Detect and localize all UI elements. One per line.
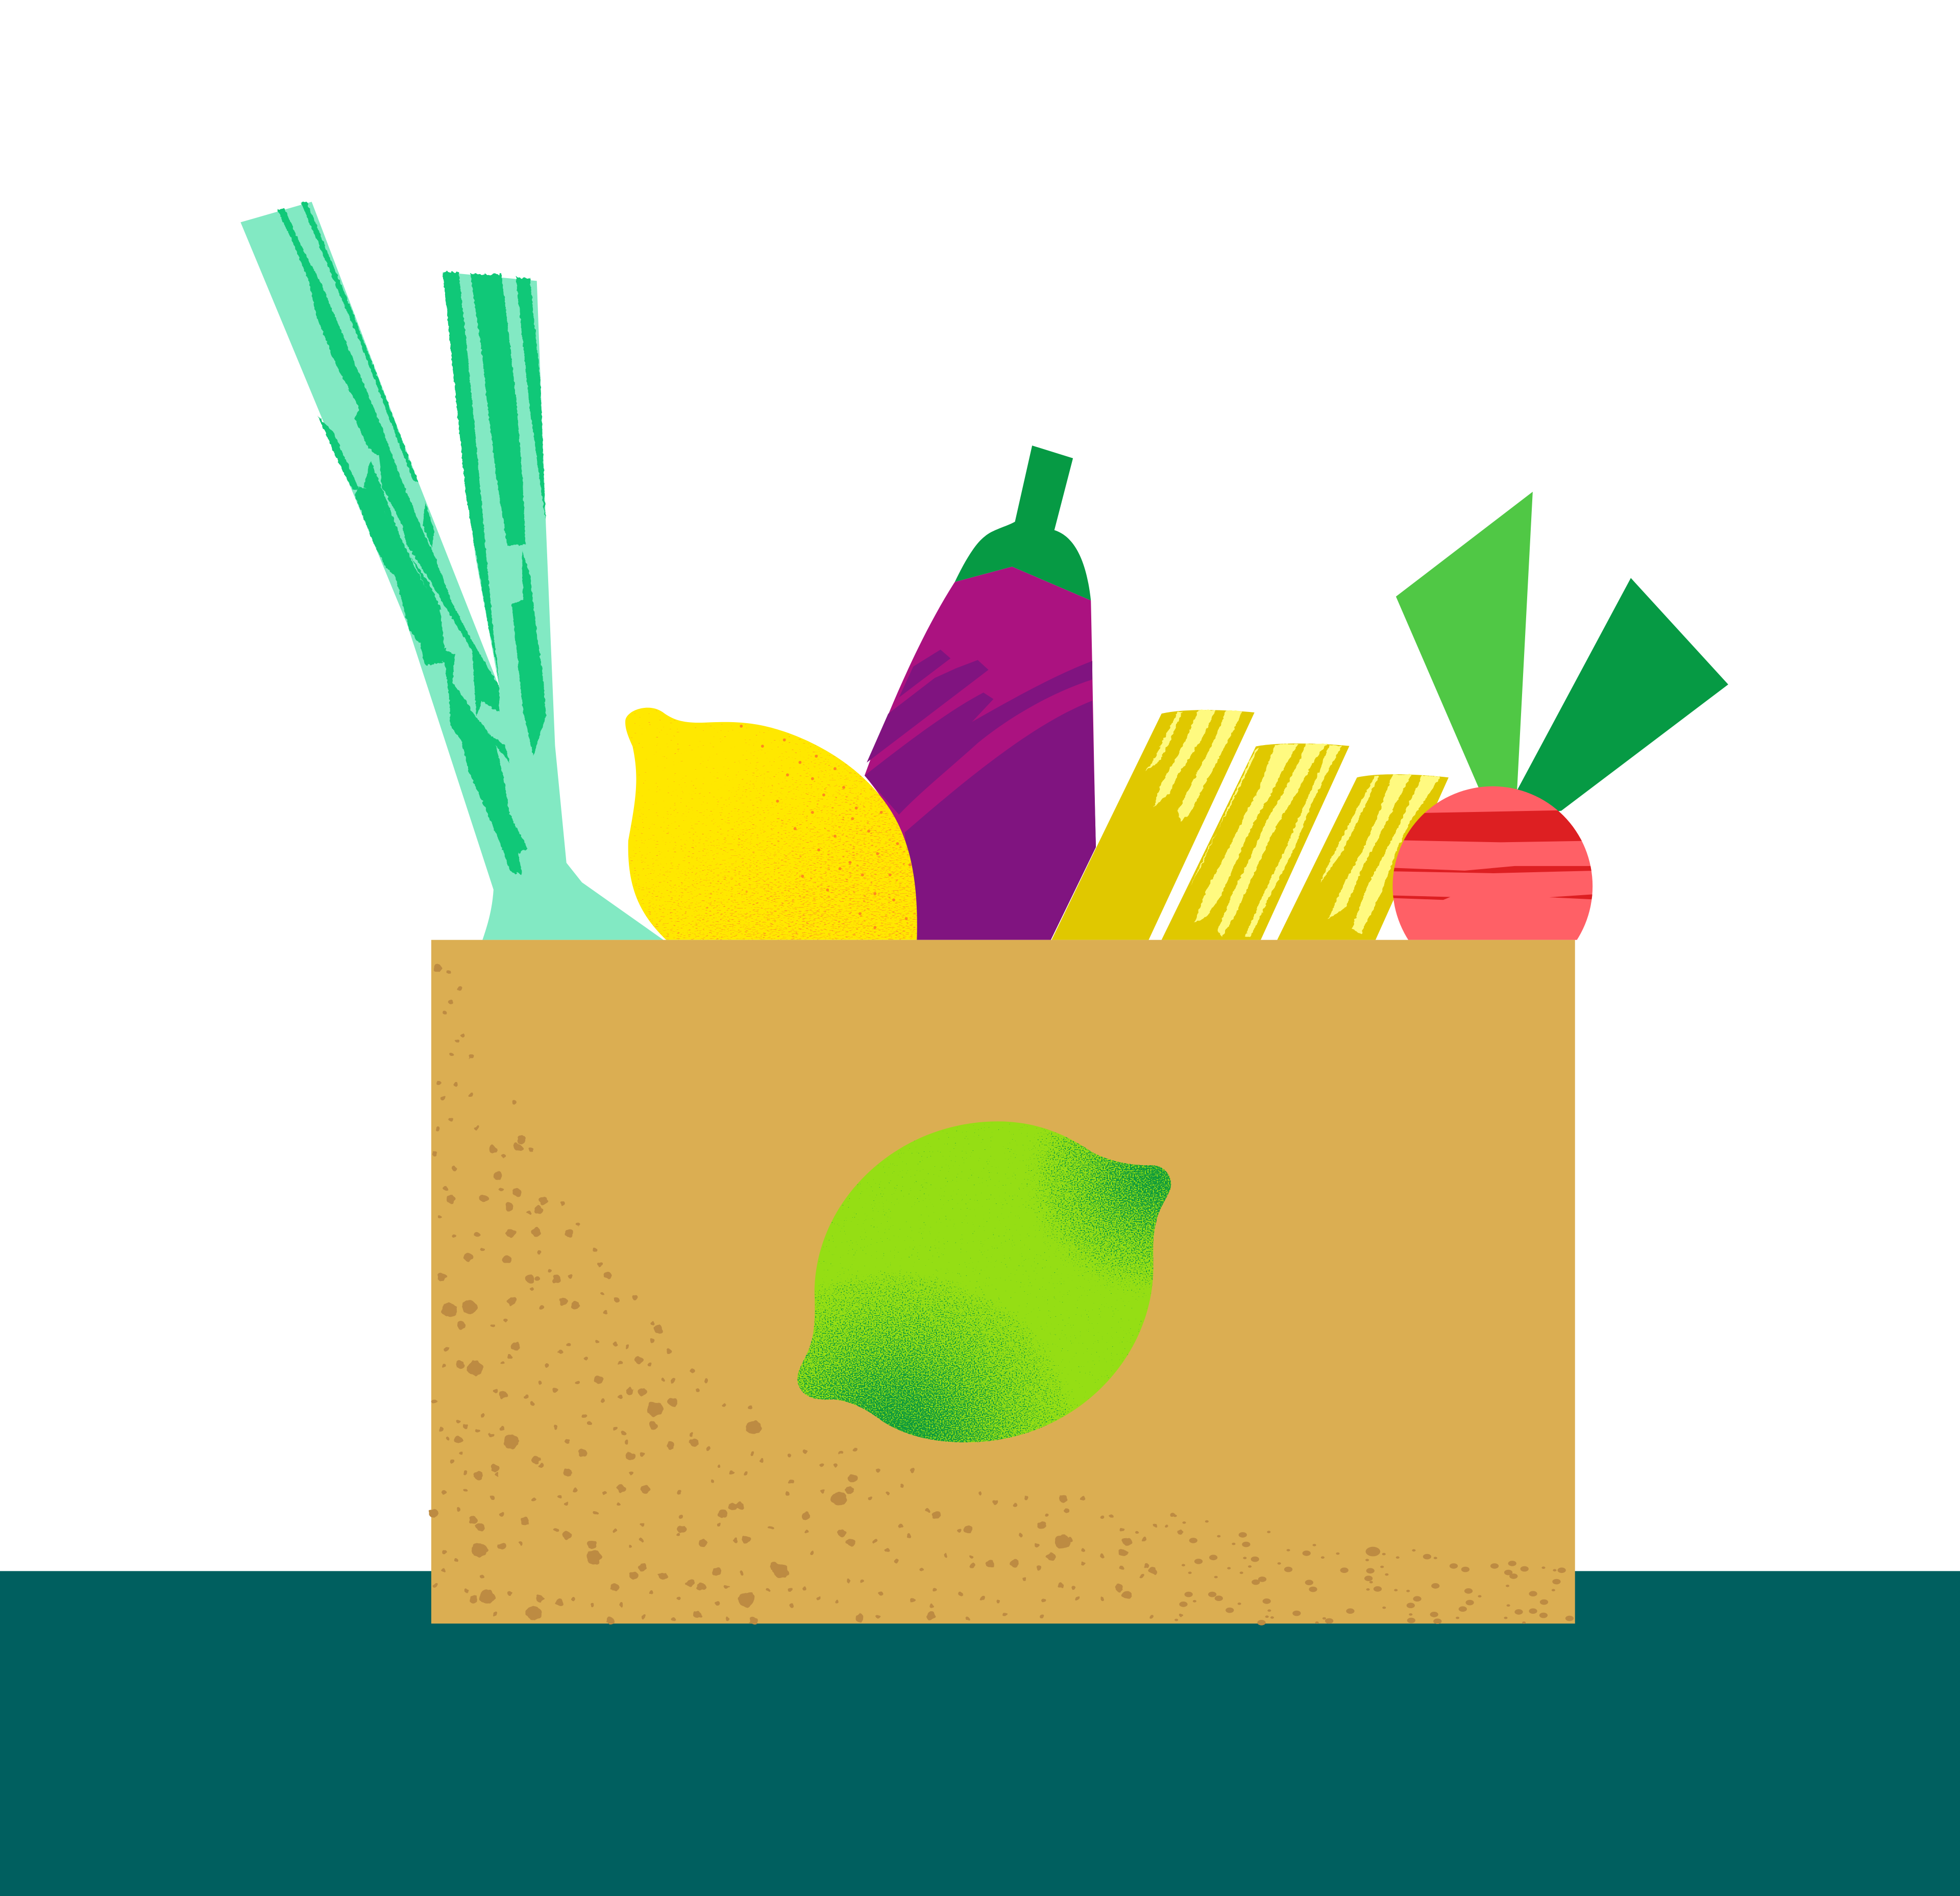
lime: upper grain shading xyxy=(797,1121,1171,1442)
box: brown speckle texture, bottom right xyxy=(1175,1516,1570,1622)
lemon: orange grain xyxy=(625,708,917,940)
eggplant: magenta body xyxy=(865,567,1096,940)
pasta xyxy=(1051,710,1449,942)
lime on box xyxy=(797,1121,1171,1442)
table surface xyxy=(0,1571,1960,1896)
pasta: three yellow tubes xyxy=(1051,710,1449,942)
cardboard box xyxy=(431,940,1575,1623)
lemon: orange specks xyxy=(741,726,910,927)
leek: pale stalk body xyxy=(240,202,665,941)
leek xyxy=(240,202,665,941)
pasta: pale highlights xyxy=(1145,710,1440,938)
eggplant: green stem and cap xyxy=(955,446,1091,601)
box: brown speckle texture, left and bottom xyxy=(434,968,1181,1621)
radish: dark green leaf xyxy=(1516,578,1728,815)
lemon: yellow fruit xyxy=(625,708,917,940)
radish: light green leaf xyxy=(1396,492,1533,792)
lemon xyxy=(625,708,917,940)
radish: red bands xyxy=(1386,810,1601,900)
radish: root xyxy=(1392,786,1592,986)
lime: fruit xyxy=(797,1121,1171,1442)
leek: green streaks xyxy=(278,202,546,875)
vegetables above the box xyxy=(240,202,1728,986)
box: front panel xyxy=(431,940,1575,1623)
lime: lower grain shading xyxy=(797,1121,1171,1442)
eggplant: purple shading xyxy=(865,650,1096,940)
eggplant xyxy=(865,446,1096,940)
radish xyxy=(1386,492,1728,986)
